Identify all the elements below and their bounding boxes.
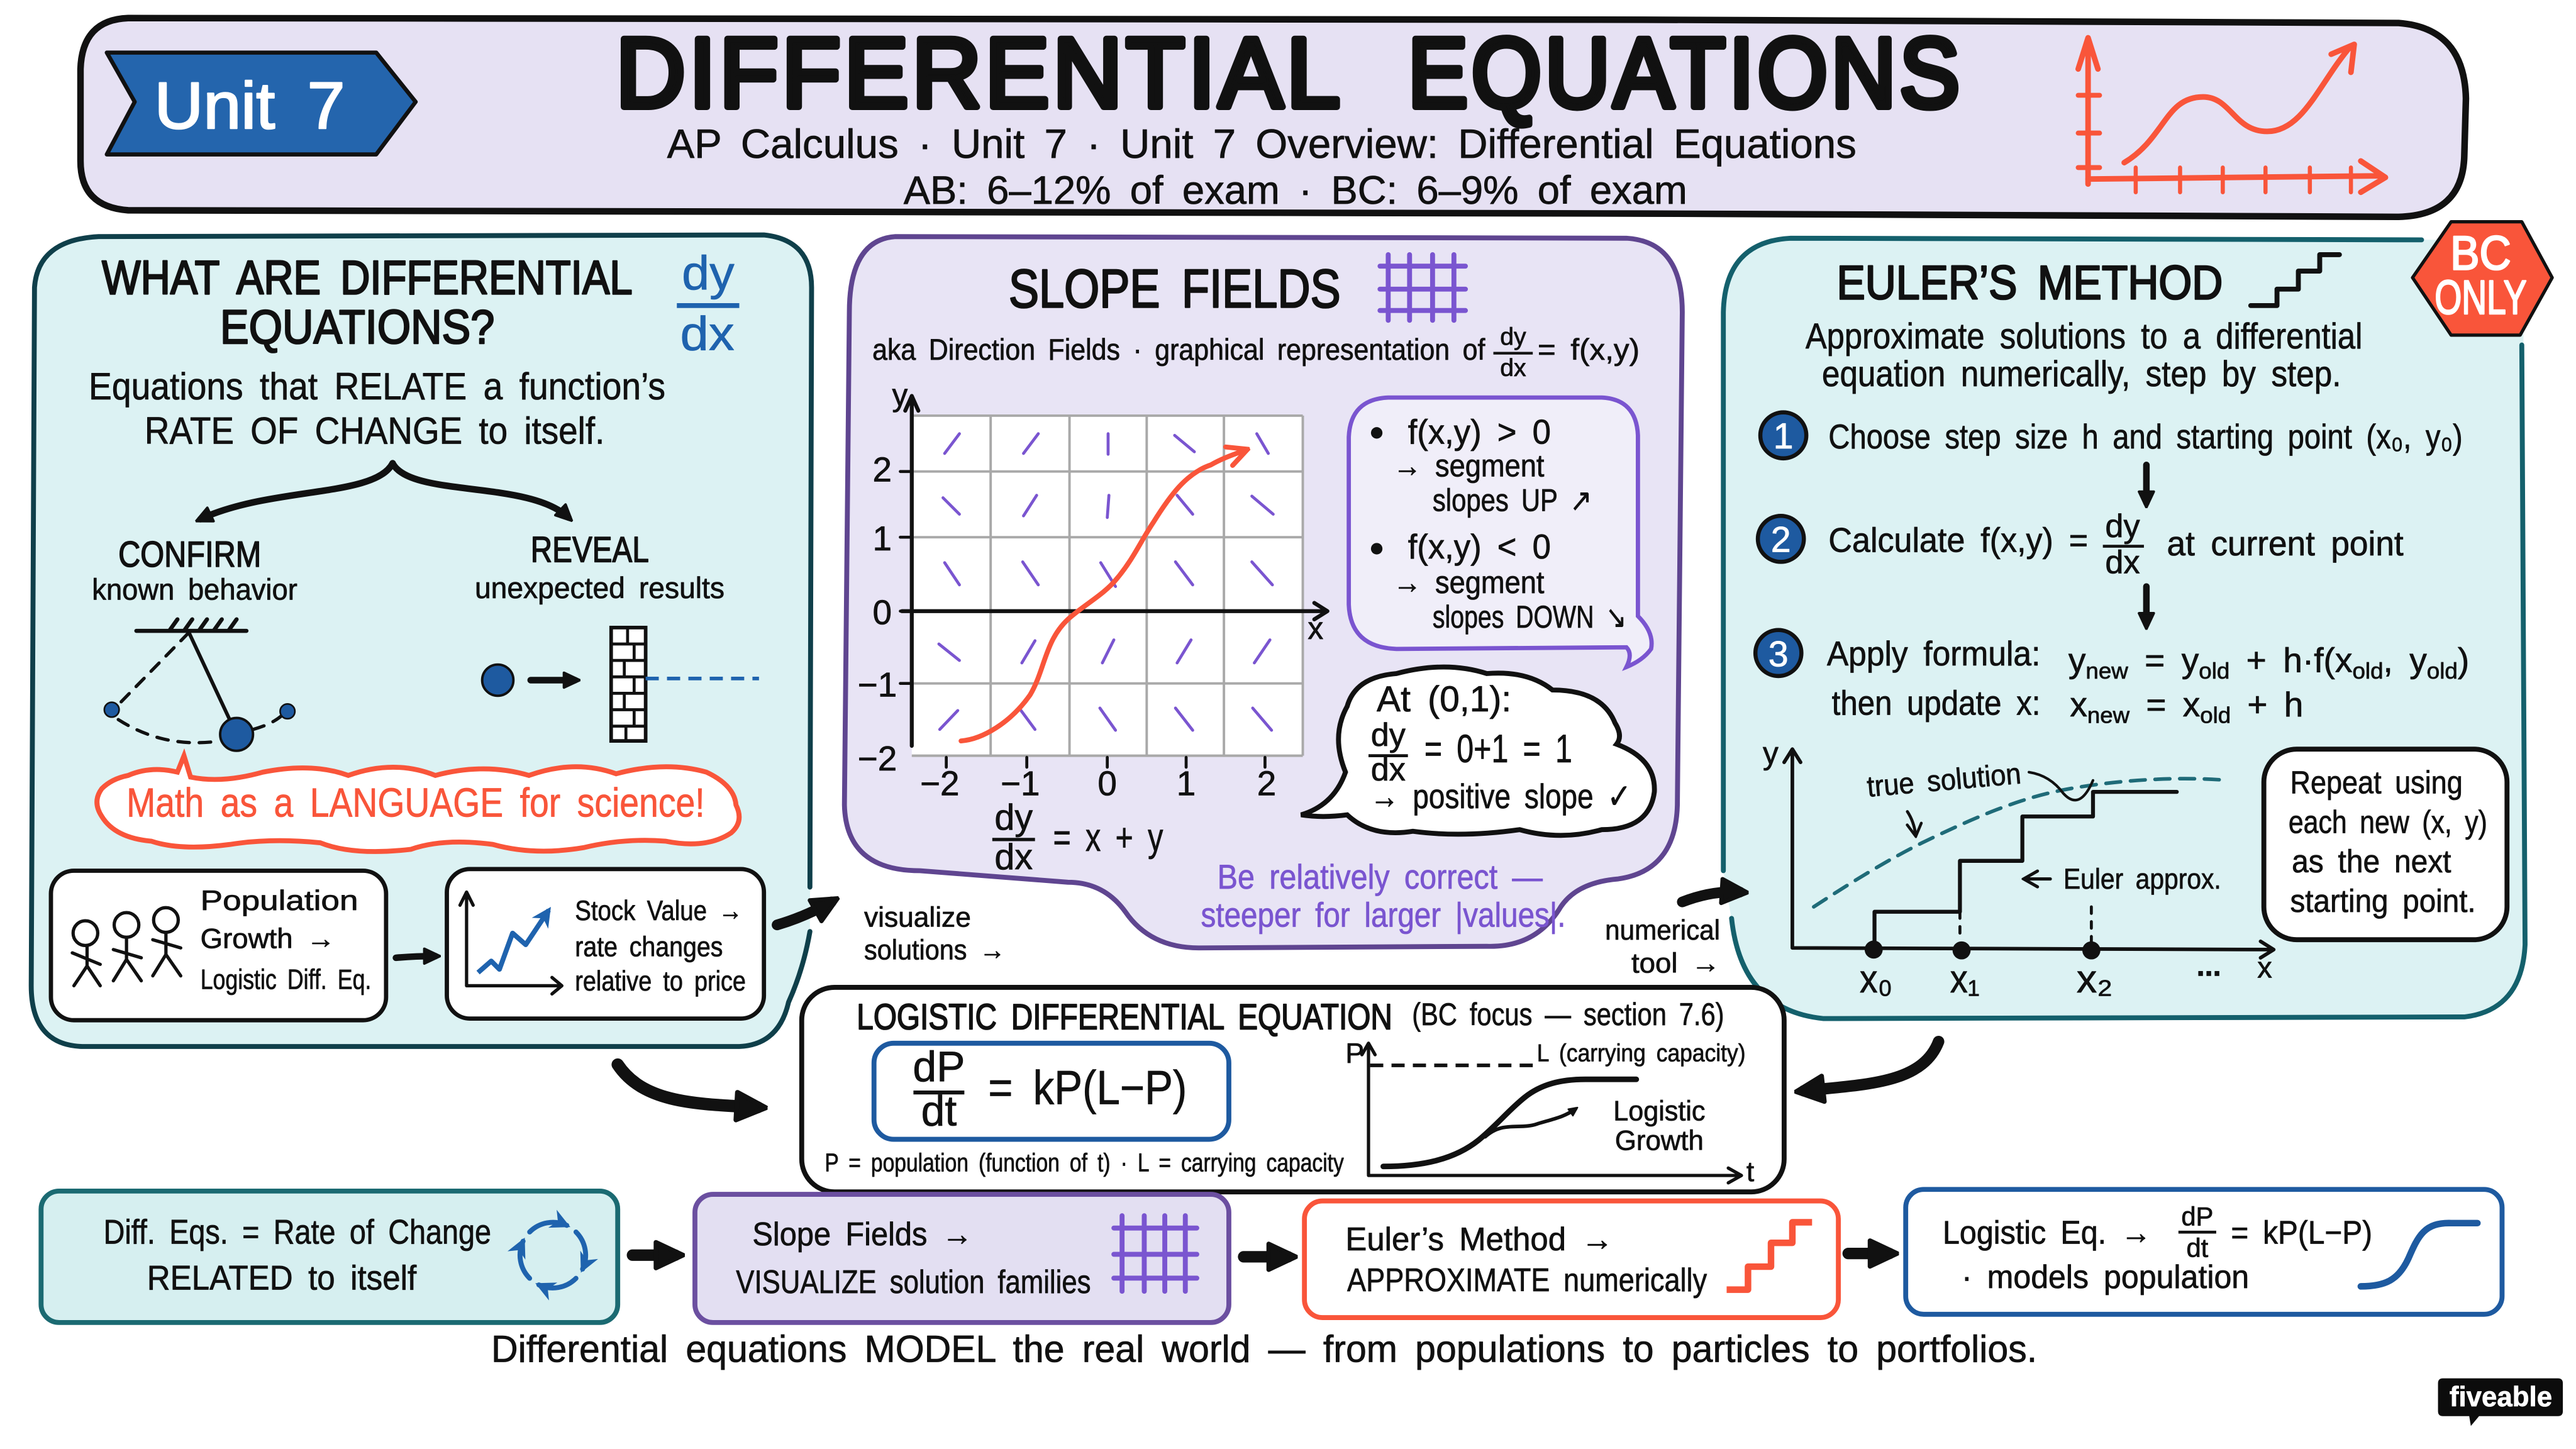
equation: dy/dx = x + y <box>992 797 1163 877</box>
step 3: old <box>2352 658 2384 684</box>
step 2 <box>1758 508 2404 581</box>
panel heading: EQUATIONS? <box>220 301 494 354</box>
icon: s curve <box>2361 1223 2477 1286</box>
axes <box>1784 749 2273 958</box>
euler approx label: Euler approx. <box>2063 863 2221 895</box>
step 3: y <box>2068 640 2085 679</box>
euler approximation chart: x₁ <box>1950 957 1980 1001</box>
step 3: = x <box>2129 685 2200 724</box>
euler approximation chart: y <box>1763 736 1779 771</box>
unit badge <box>107 53 416 155</box>
reveal label <box>475 530 724 604</box>
equation box: dP <box>913 1043 965 1091</box>
subtitle: AP Calculus · Unit 7 · Unit 7 Overview: Differential Equations <box>667 121 1857 167</box>
reveal label: REVEAL <box>531 530 649 570</box>
label: numerical tool <box>1605 915 1720 979</box>
arrow: to slope fields <box>777 902 831 925</box>
step 2: dy <box>2105 508 2140 545</box>
example card: population growth: Logistic Diff. Eq. <box>201 965 371 996</box>
equation box: dt <box>921 1087 957 1135</box>
subtitle <box>667 121 1857 213</box>
callout: worked example cloud <box>1301 667 1655 835</box>
summary box: slope fields <box>695 1194 1229 1323</box>
slope field chart <box>858 377 1328 802</box>
axes: −1 <box>1001 763 1040 802</box>
callout: worked example cloud: = 0+1 = 1 <box>1424 727 1572 771</box>
summary box: rate of change: Diff. Eqs. = Rate of Change <box>104 1212 491 1251</box>
summary box: euler's method <box>1304 1201 1838 1318</box>
equation: dy/dx = x + y: dx <box>994 837 1033 877</box>
icon: dy/dx: dy <box>682 247 735 300</box>
icon: grid <box>1380 255 1465 320</box>
callout: worked example cloud: → positive slope ✓ <box>1370 777 1631 816</box>
intro text <box>1806 316 2362 394</box>
step 3: = y <box>2128 640 2199 679</box>
definition line: = f(x,y) <box>1538 333 1640 366</box>
step 2: at current point <box>2167 524 2404 563</box>
summary box: logistic equation: · models population <box>1962 1259 2249 1296</box>
axes: 1 <box>873 519 892 558</box>
logistic growth chart: L (carrying capacity) <box>1537 1040 1746 1067</box>
axes: 0 <box>1097 763 1117 802</box>
axes: 2 <box>873 450 892 489</box>
label: visualize solutions: visualize <box>864 902 971 933</box>
euler staircase <box>1875 792 2177 945</box>
label: numerical tool: numerical <box>1605 915 1720 946</box>
equation: dy/dx = x + y: dy <box>994 797 1033 838</box>
label: visualize solutions <box>864 902 1006 966</box>
summary box: rate of change <box>41 1191 618 1323</box>
equation: dy/dx = x + y: = x + y <box>1053 816 1163 860</box>
callout: slope sign rules: f(x,y) > 0 <box>1408 412 1551 451</box>
callout: repeat: as the next <box>2292 843 2451 879</box>
step 1: Choose step size h and starting point (x₀, y₀) <box>1828 417 2463 456</box>
confirm label: known behavior <box>92 572 297 606</box>
note: be relatively correct: steeper for larger |values|. <box>1201 895 1565 934</box>
summary box: euler's method: APPROXIMATE numerically <box>1347 1262 1707 1299</box>
logistic growth chart: Logistic <box>1613 1096 1706 1127</box>
definition text <box>89 365 665 452</box>
panel heading <box>102 252 633 354</box>
axes: 0 <box>873 593 892 632</box>
summary box: euler's method: Euler’s Method → <box>1345 1221 1613 1258</box>
header banner <box>80 18 2466 217</box>
arrow: branching brace <box>201 464 569 519</box>
definition text: RATE OF CHANGE to itself. <box>145 409 604 452</box>
confirm label <box>92 535 297 606</box>
axes: y <box>892 377 908 413</box>
icon: grid <box>1114 1216 1197 1291</box>
true solution label <box>1865 757 2093 835</box>
callout: slope sign rules <box>1349 397 1652 667</box>
summary box: logistic equation: dt <box>2186 1233 2209 1262</box>
panel: slope fields <box>845 236 1682 948</box>
callout: slope sign rules: slopes DOWN ↘ <box>1433 599 1626 635</box>
callout: repeat: each new (x, y) <box>2289 804 2487 840</box>
step 3 <box>1755 630 2469 728</box>
summary box: logistic equation: = kP(L−P) <box>2231 1214 2372 1251</box>
callout: repeat <box>2264 749 2507 940</box>
step 2: dx <box>2105 545 2140 581</box>
step 1: 1 <box>1774 416 1794 457</box>
panel heading: EULER’S METHOD <box>1836 256 2223 309</box>
icon: red stairs <box>1726 1223 1812 1290</box>
reveal label: unexpected results <box>475 571 724 604</box>
summary box: slope fields: VISUALIZE solution families <box>736 1264 1091 1301</box>
definition line <box>872 324 1640 382</box>
panel heading: LOGISTIC DIFFERENTIAL EQUATION <box>857 997 1392 1038</box>
note: be relatively correct <box>1201 857 1565 934</box>
definitions: P = population (function of t) · L = carrying capacity <box>824 1148 1344 1177</box>
icon: tunneling ball and wall <box>482 628 759 741</box>
axes: x <box>1307 611 1323 646</box>
callout: math as a language: Math as a LANGUAGE for science! <box>126 779 705 825</box>
step 3: old <box>2200 702 2231 728</box>
axes: −1 <box>858 665 897 704</box>
step 3: ) <box>2458 640 2469 679</box>
callout: slope sign rules: f(x,y) < 0 <box>1408 527 1551 566</box>
subtitle: AB: 6–12% of exam · BC: 6–9% of exam <box>904 169 1687 213</box>
icon: three stick figures <box>72 908 180 985</box>
equation box: = kP(L−P) <box>988 1061 1187 1114</box>
arrow: to euler's method <box>1682 892 1740 902</box>
example card: population growth: Population <box>201 886 358 916</box>
badge: BC only <box>2412 222 2552 335</box>
euler approximation chart: x₂ <box>2077 957 2112 1001</box>
icon: dy/dx <box>677 247 740 360</box>
panel: what are differential equations <box>31 235 811 1046</box>
panel: euler's method <box>1723 238 2525 1019</box>
summary box: rate of change: RELATED to itself <box>147 1258 417 1297</box>
callout: repeat: starting point. <box>2290 883 2476 919</box>
unit badge: Unit 7 <box>155 69 345 143</box>
example card: stock value: rate changes <box>575 931 723 962</box>
summary box: logistic equation: dP <box>2181 1202 2213 1231</box>
arrow: summary 3 to 4 <box>1848 1252 1889 1256</box>
axes: 2 <box>1257 763 1276 802</box>
arrow: step 1 to 2 <box>2145 465 2148 502</box>
summary box: logistic equation <box>1906 1189 2502 1314</box>
arrow: population to stock <box>396 956 435 958</box>
logistic growth chart: P <box>1345 1038 1364 1069</box>
arrow: from definition panel to logistic <box>618 1065 757 1108</box>
axes: −2 <box>920 763 959 802</box>
arrow: step 2 to 3 <box>2145 587 2148 625</box>
solution curve <box>961 450 1245 741</box>
step 3: then update x: <box>1832 683 2040 722</box>
icon: dy/dx: dx <box>680 307 735 360</box>
definition line: dx <box>1500 355 1526 382</box>
step 3: x <box>2070 685 2087 724</box>
step 3: , y <box>2384 640 2427 679</box>
label: numerical tool: tool → <box>1631 948 1720 979</box>
step 3: new <box>2085 658 2128 684</box>
panel heading: (BC focus — section 7.6) <box>1412 997 1724 1032</box>
step 3: 3 <box>1768 634 1789 674</box>
logistic growth chart <box>1345 1038 1755 1187</box>
euler approximation chart: ... <box>2197 949 2221 982</box>
callout: worked example cloud: dy <box>1371 717 1406 753</box>
confirm label: CONFIRM <box>118 535 261 575</box>
badge: BC only: BC <box>2450 226 2511 280</box>
step 2: Calculate f(x,y) = <box>1828 521 2088 560</box>
step 2: 2 <box>1771 520 1791 560</box>
definition line: dy <box>1500 324 1526 351</box>
true solution dashed curve <box>1814 779 2228 907</box>
equation box <box>874 1043 1229 1140</box>
callout: math as a language <box>97 756 739 852</box>
main title <box>616 18 1963 128</box>
panel: logistic differential equation <box>802 987 1784 1192</box>
slope segments <box>939 434 1273 730</box>
main title: DIFFERENTIAL <box>616 18 1344 128</box>
step 3: new <box>2087 702 2130 728</box>
label: visualize solutions: solutions → <box>864 935 1006 966</box>
example card: population growth <box>51 870 386 1020</box>
summary box: slope fields: Slope Fields → <box>752 1216 972 1253</box>
logo: fiveable: fiveable <box>2450 1382 2552 1413</box>
logistic growth chart: Growth <box>1615 1126 1704 1157</box>
example card: stock value: relative to price <box>575 966 746 997</box>
logistic growth chart: t <box>1746 1157 1755 1187</box>
arrow: summary 1 to 2 <box>633 1253 675 1257</box>
main title: EQUATIONS <box>1408 18 1963 128</box>
arrow: from euler panel to logistic <box>1804 1041 1938 1091</box>
step 3: Apply formula: <box>1827 634 2040 673</box>
euler approximation chart <box>1763 736 2273 1001</box>
step 3: old <box>2199 658 2229 684</box>
arrow: summary 2 to 3 <box>1243 1255 1288 1259</box>
icon: pendulum <box>104 619 295 751</box>
definition text: Equations that RELATE a function’s <box>89 365 665 408</box>
panel heading: WHAT ARE DIFFERENTIAL <box>102 252 633 305</box>
note: be relatively correct: Be relatively correct — <box>1218 857 1543 896</box>
step 1 <box>1760 413 2463 458</box>
axes: −2 <box>858 739 897 778</box>
logo: fiveable <box>2438 1379 2563 1426</box>
footer takeaway: Differential equations MODEL the real world — from populations to particles to portfolios. <box>491 1328 2037 1370</box>
example card: population growth: Growth → <box>201 923 335 954</box>
euler approximation chart: x <box>2257 950 2272 984</box>
step 3: + h·f(x <box>2229 640 2352 679</box>
example card: stock value <box>447 869 764 1019</box>
intro text: Approximate solutions to a differential <box>1806 316 2362 357</box>
icon: stock chart <box>460 892 562 994</box>
callout: repeat: Repeat using <box>2290 765 2463 801</box>
step 3: old <box>2427 658 2458 684</box>
icon: stairs <box>2251 255 2340 306</box>
badge: BC only: ONLY <box>2434 271 2527 325</box>
summary box: logistic equation: Logistic Eq. → <box>1943 1214 2151 1251</box>
euler approximation chart: x₀ <box>1860 957 1892 1001</box>
intro text: equation numerically, step by step. <box>1822 354 2341 394</box>
callout: slope sign rules: → segment <box>1393 565 1545 600</box>
example card: stock value: Stock Value → <box>575 896 743 926</box>
panel heading: SLOPE FIELDS <box>1009 258 1341 319</box>
callout: slope sign rules: → segment <box>1393 448 1545 484</box>
true solution label: true solution <box>1865 757 2023 803</box>
step 3: + h <box>2231 685 2303 724</box>
definition line: aka Direction Fields · graphical representation of <box>872 333 1485 366</box>
icon: cycle arrows <box>520 1223 586 1288</box>
callout: slope sign rules: slopes UP ↗ <box>1433 482 1592 518</box>
icon: header graph <box>2078 38 2385 192</box>
axes <box>858 377 1328 802</box>
axes: 1 <box>1177 763 1196 802</box>
callout: worked example cloud: At (0,1): <box>1377 679 1511 719</box>
callout: worked example cloud: dx <box>1371 752 1406 788</box>
